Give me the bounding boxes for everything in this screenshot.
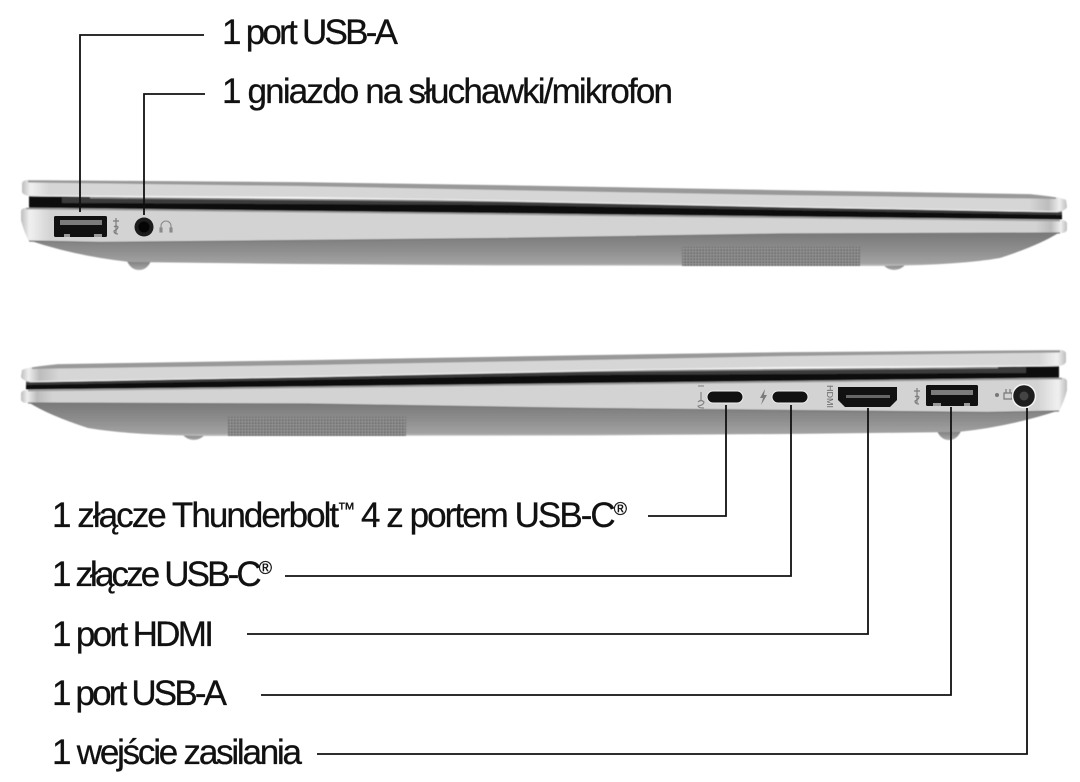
port: HDMI [838, 387, 897, 407]
icon: power plug [1004, 389, 1015, 399]
port: USB-A [54, 216, 107, 237]
port: Thunderbolt [772, 391, 808, 403]
port: power input [1012, 384, 1036, 408]
leader line [648, 405, 726, 516]
label: 4 z portem USB-C [353, 496, 616, 535]
callout: power input [52, 408, 1027, 772]
label: 1 port HDMI [52, 615, 214, 654]
laptop body: right side [21, 350, 1067, 440]
label: 1 złącze Thunderbolt [52, 496, 339, 535]
label: ® [614, 499, 627, 519]
leader line [317, 408, 1027, 754]
laptop right side view [21, 350, 1067, 440]
callout: Thunderbolt [52, 405, 726, 535]
label: 1 złącze USB-C [52, 555, 262, 594]
leader line [247, 408, 868, 634]
icon: Thunderbolt bolt [760, 389, 767, 405]
callout: headphone jack [144, 72, 673, 215]
port: USB-C [707, 391, 743, 403]
label: 1 gniazdo na słuchawki/mikrofon [222, 72, 673, 111]
label: ® [259, 558, 272, 578]
icon: status LED [995, 393, 999, 397]
callout: HDMI [52, 408, 868, 654]
label: 1 port USB-A [222, 13, 399, 52]
port: headphone jack [134, 218, 154, 236]
callout: USB-A (right side) [52, 407, 951, 713]
leader line [144, 94, 205, 215]
label: 1 wejście zasilania [52, 733, 303, 772]
icon: headphones [160, 221, 172, 232]
callout: USB-A (left side) [80, 13, 399, 212]
callout: USB-C [52, 405, 791, 594]
leader line [80, 35, 204, 212]
label: ™ [337, 499, 355, 519]
label: 1 port USB-A [52, 674, 228, 713]
icon: USB SuperSpeed mark [914, 388, 920, 404]
icon: USB SuperSpeed mark [113, 218, 119, 234]
laptop body: left side [21, 180, 1067, 270]
leader line [285, 405, 791, 576]
laptop left side view [21, 180, 1067, 270]
icon: USB-C label marks [698, 386, 704, 408]
port: USB-A [926, 385, 978, 406]
leader line [261, 407, 951, 695]
icon: HDMI label: HDMI [825, 385, 834, 408]
